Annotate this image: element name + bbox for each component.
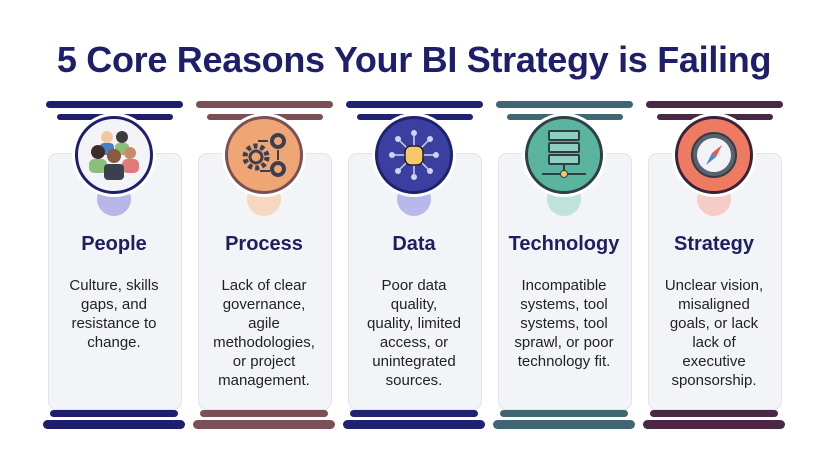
text: technology: sprawl, or poor — [514, 334, 614, 351]
text: technology: technology fit. — [518, 353, 610, 370]
text: strategy: sponsorship. — [671, 372, 757, 389]
panel: data — [343, 101, 485, 429]
panel: people — [43, 101, 185, 429]
text: strategy: misaligned — [678, 296, 750, 313]
text: people: Culture, skills — [69, 277, 159, 294]
text: people: resistance to — [71, 315, 157, 332]
text: process — [213, 277, 315, 389]
text: data: access, or — [380, 334, 448, 351]
text: process: management. — [218, 372, 310, 389]
text: people: change. — [87, 334, 141, 351]
text: process: methodologies, — [213, 334, 315, 351]
text: strategy: Unclear vision, — [665, 277, 763, 294]
text: process: agile — [248, 315, 280, 332]
text: strategy: goals, or lack — [670, 315, 758, 332]
heading: Strategy: Strategy — [674, 233, 754, 255]
text: data: sources. — [386, 372, 442, 389]
text: strategy — [665, 277, 763, 389]
heading: Process: Process — [225, 233, 303, 255]
text: process: or project — [233, 353, 295, 370]
icon: people — [75, 116, 153, 194]
heading: People: People — [81, 233, 147, 255]
icon: servers — [525, 116, 603, 194]
text: technology: systems, tool — [520, 296, 608, 313]
icon: compass — [675, 116, 753, 194]
panel: technology — [493, 101, 635, 429]
icon: database — [375, 116, 453, 194]
heading: Technology: Technology — [509, 233, 619, 255]
text: data: quality, limited — [367, 315, 461, 332]
text: data: unintegrated — [372, 353, 456, 370]
text: people — [69, 277, 159, 351]
text: people: gaps, and — [81, 296, 147, 313]
text: strategy: lack of — [692, 334, 736, 351]
text: process: governance, — [223, 296, 305, 313]
text: technology — [514, 277, 614, 370]
heading: Data: Data — [392, 233, 436, 255]
text: data: quality, — [391, 296, 437, 313]
title: 5 Core Reasons Your BI Strategy is Failing — [57, 39, 771, 80]
panel: process — [193, 101, 335, 429]
text: technology: systems, tool — [520, 315, 608, 332]
panel: strategy — [643, 101, 785, 429]
text: data — [367, 277, 461, 389]
icon: gears — [225, 116, 303, 194]
text: technology: Incompatible — [521, 277, 607, 294]
text: strategy: executive — [682, 353, 746, 370]
text: process: Lack of clear — [221, 277, 307, 294]
text: data: Poor data — [381, 277, 447, 294]
